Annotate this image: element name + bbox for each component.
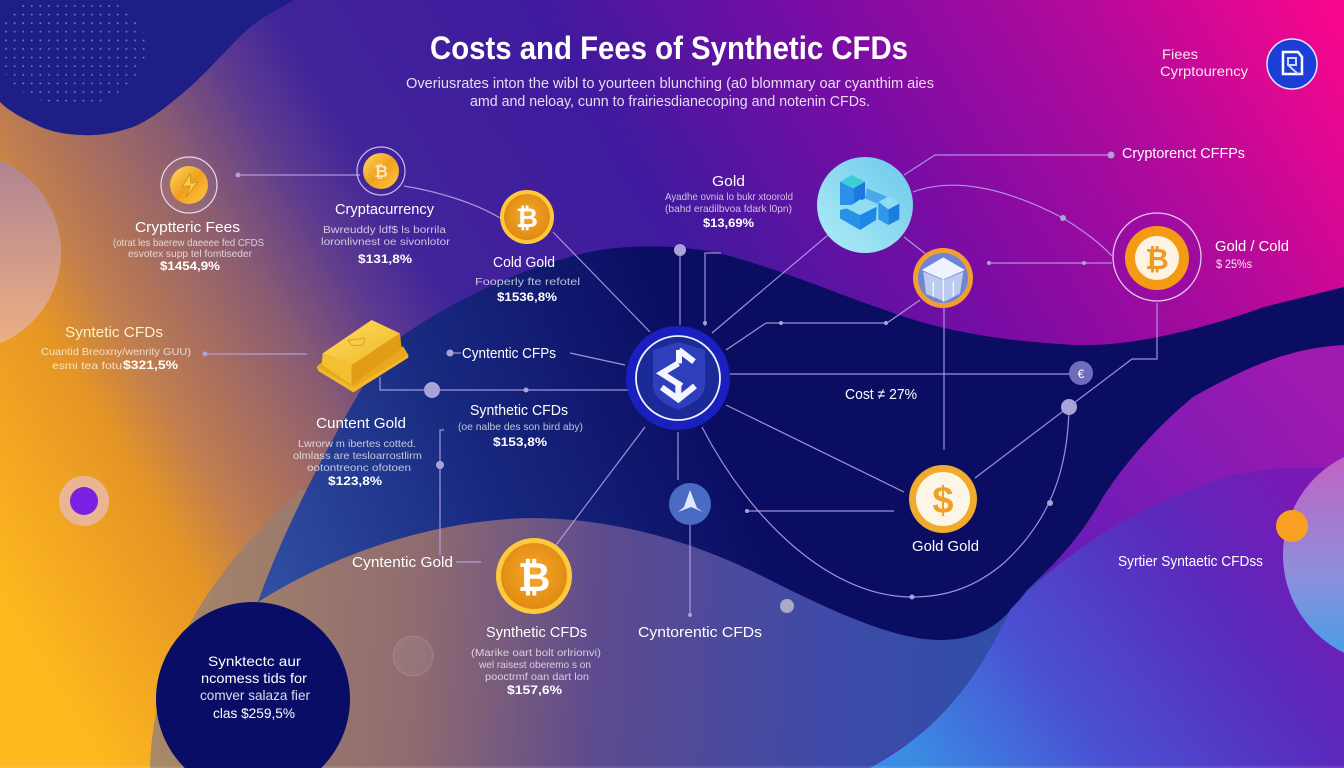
node: gold label top: Gold [712, 173, 745, 190]
subtitle [406, 75, 934, 110]
legend: header label: Cyrptourency [1160, 63, 1248, 79]
decorative ring: faint [393, 636, 433, 676]
node: synthetic CFDs middle: Synthetic CFDs [470, 402, 568, 419]
node: gold gold: Fooperly fte refotel [475, 276, 580, 288]
icon: crystal box coin [913, 248, 973, 308]
decorative circle: left pale [0, 153, 61, 351]
icon: bitcoin ring [1113, 213, 1201, 301]
node: synthetic CFDs left: esmi tea fotu [52, 360, 122, 372]
icon: dollar coin: $ [932, 480, 954, 522]
node: synthetic CFDs left [41, 324, 191, 372]
node: crypto fees: Cryptteric Fees [135, 219, 240, 236]
label: cost: Cost ≠ 27% [845, 386, 917, 403]
panel: navy summary circle: comver salaza fier [200, 687, 310, 703]
icon: euro node [1069, 361, 1093, 385]
node: dollar coin: Gold Gold [912, 538, 979, 555]
node: gold label top: (bahd eradilbvoa fdark l0pn) [665, 203, 792, 215]
icon: large bitcoin coin: ₿ [518, 556, 550, 600]
node: cuntent gold [293, 415, 422, 488]
node: bitcoin bottom [471, 538, 601, 697]
icon: bitcoin coin: ₿ [516, 203, 538, 233]
panel: navy summary circle: Synktectc aur [208, 653, 301, 669]
label: gold cold [1215, 238, 1289, 271]
node: gold gold: $1536,8% [497, 290, 557, 304]
title: Costs and Fees of Synthetic CFDs [430, 30, 908, 66]
node: gold label top: Ayadhe ovnia lo bukr xtoorold [665, 191, 793, 203]
icon: euro node: € [1078, 367, 1085, 381]
decorative circle: purple dot [59, 476, 109, 526]
node: cryptocurrency [321, 147, 451, 266]
icon: large bitcoin coin [496, 538, 572, 614]
node: crypto fees: (otrat les baerew daeeee fed CFDS [113, 237, 264, 249]
node: crypto fees [113, 157, 264, 273]
node: cuntent gold: olmlass are tesloarrostlirm [293, 450, 422, 462]
decorative circle: right [1283, 446, 1344, 664]
node: bitcoin bottom: wel raisest oberemo s on [478, 659, 591, 671]
node: synthetic CFDs left: Cuantid Breoxny/wenrity GUU) [41, 346, 191, 358]
node: bitcoin bottom: pooctrmf oan dart lon [485, 671, 589, 683]
node: synthetic CFDs bottom right: Syrtier Syntaetic CFDss [1118, 553, 1263, 570]
node: crypto fees: esvotex supp tel fomtiseder [128, 248, 252, 260]
label: gold cold: $ 25%s [1216, 257, 1252, 271]
label: cyntorentic CFDs: Cyntorentic CFDs [638, 624, 762, 641]
decorative blob: top left [0, 0, 294, 135]
label: cyntentic CFPs: Cyntentic CFPs [462, 345, 556, 362]
node: gold label top [665, 173, 793, 230]
legend: header label: Fiees [1162, 46, 1198, 62]
node: dollar coin [909, 465, 979, 555]
panel: navy summary circle: ncomess tids for [201, 670, 307, 686]
node: synthetic CFDs middle [458, 402, 583, 449]
node: bitcoin bottom: Synthetic CFDs [486, 624, 587, 641]
node: cryptocurrency: Bwreuddy ldf$ ls borrila [323, 224, 446, 236]
node: cryptocurrency: Cryptacurrency [335, 201, 434, 218]
node: cryptocurrency: $131,8% [358, 252, 412, 266]
node: synthetic CFDs left: $321,5% [123, 358, 178, 372]
icon: gold coin [161, 157, 217, 213]
node: synthetic CFDs left: Syntetic CFDs [65, 324, 163, 341]
node: synthetic CFDs middle: (oe nalbe des son bird aby) [458, 421, 583, 433]
panel: navy summary circle [156, 602, 350, 768]
node: gold label top: $13,69% [703, 216, 754, 230]
icon: coin: ₿ [374, 162, 388, 181]
node: cryptorenct CFFPs: Cryptorenct CFFPs [1122, 145, 1245, 162]
node: bitcoin bottom: (Marike oart bolt orlrionvi) [471, 647, 601, 659]
icon: gold bar [317, 320, 408, 392]
connector lines [202, 152, 1157, 617]
node: cuntent gold: Lwrorw m ibertes cotted. [298, 438, 416, 450]
node: cryptocurrency: loronlivnest oe sivonlotor [321, 236, 451, 248]
icon: bitcoin ring: ₿ [1145, 244, 1169, 276]
node: crypto fees: $1454,9% [160, 259, 220, 273]
legend: header label [1160, 46, 1248, 79]
node: gold gold [475, 190, 580, 304]
node: bitcoin bottom: $157,6% [507, 683, 562, 697]
node: cuntent gold: Cuntent Gold [316, 415, 406, 432]
decorative dot: orange [1276, 510, 1308, 542]
subtitle: amd and neloay, cunn to frairiesdianecoping and notenin CFDs. [470, 93, 870, 110]
label: gold cold: Gold / Cold [1215, 238, 1289, 255]
subtitle: Overiusrates inton the wibl to yourteen blunching (a0 blommary oar cyanthim aies [406, 75, 934, 92]
icon: blue cubes [817, 157, 913, 253]
icon: header badge [1267, 39, 1317, 89]
node: cuntent gold: $123,8% [328, 474, 382, 488]
node: gold gold: Cold Gold [493, 254, 555, 271]
icon: small blue node [669, 483, 711, 525]
label: cyntentic gold: Cyntentic Gold [352, 554, 453, 571]
panel: navy summary circle: clas $259,5% [213, 705, 295, 721]
node: cuntent gold: ootontreonc ofotoen [307, 462, 411, 474]
node: synthetic CFDs middle: $153,8% [493, 435, 547, 449]
node: central hub [626, 326, 730, 430]
